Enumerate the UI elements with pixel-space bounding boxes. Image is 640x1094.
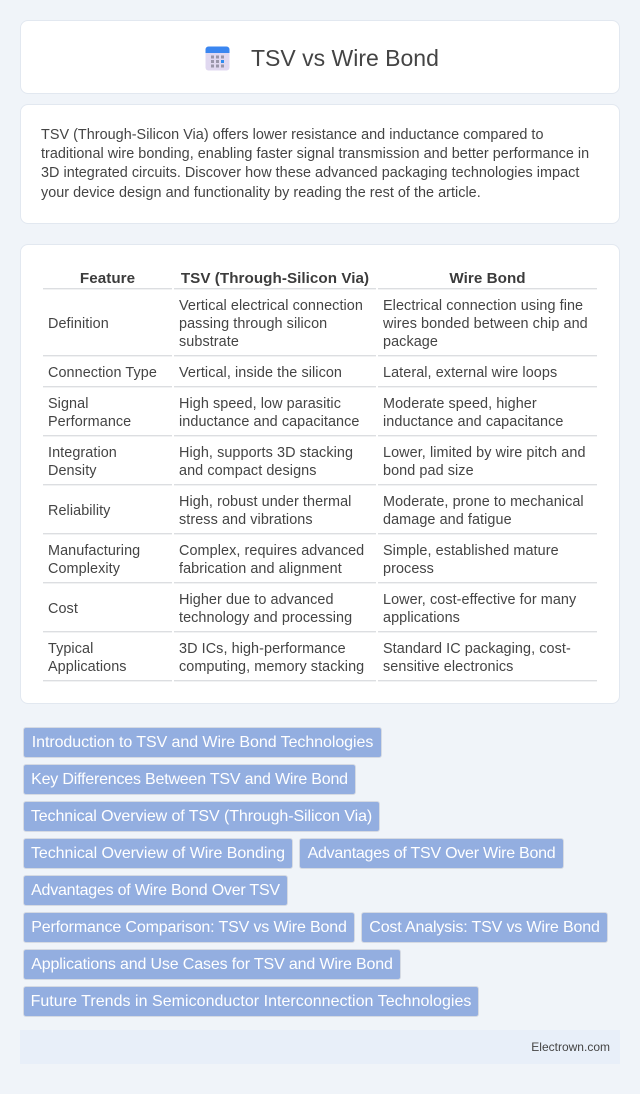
row: Reliability: High, robust under thermal — [179, 494, 351, 510]
row: Connection Type: Lateral, external wire loops — [383, 365, 557, 381]
tag: applications — [23, 949, 401, 980]
row: Cost: Cost — [48, 601, 78, 617]
intro text — [41, 127, 589, 201]
row: Definition: substrate — [179, 334, 239, 350]
row: Definition — [48, 298, 588, 350]
row: Connection Type: Vertical, inside the silicon — [179, 365, 342, 381]
row: Cost: applications — [383, 610, 460, 626]
table header row — [80, 270, 526, 287]
topic tags — [23, 727, 608, 1017]
intro panel — [20, 104, 620, 224]
footer credit: Electrown.com — [531, 1040, 610, 1054]
tag: TSV overview: Technical Overview of TSV (Through-Silicon Via) — [31, 808, 372, 825]
row: Typical Applications: sensitive electronics — [383, 659, 513, 675]
row: Reliability — [48, 494, 584, 528]
row: Manufacturing Complexity: process — [383, 561, 434, 577]
row: Connection Type — [48, 365, 557, 381]
tag: future trends: Future Trends in Semiconductor Interconnection Technologies — [31, 993, 471, 1010]
tag: performance comparison — [23, 912, 355, 943]
row: Integration Density: High, supports 3D stacking — [179, 445, 353, 461]
row: Integration Density: Integration — [48, 445, 117, 461]
row: Integration Density: Density — [48, 463, 97, 479]
footer — [20, 1030, 620, 1064]
table header row: Wire Bond — [449, 270, 526, 287]
tag: performance comparison: Performance Comparison: TSV vs Wire Bond — [31, 919, 347, 936]
tag: applications: Applications and Use Cases for TSV and Wire Bond — [31, 956, 393, 973]
tag: wire bonding overview: Technical Overview of Wire Bonding — [31, 845, 285, 862]
row: Typical Applications: computing, memory stacking — [179, 659, 364, 675]
tag: advantages of wire bond — [23, 875, 288, 906]
row: Signal Performance: Signal — [48, 396, 88, 412]
tag: key differences: Key Differences Between TSV and Wire Bond — [31, 771, 348, 788]
row: Manufacturing Complexity: Manufacturing — [48, 543, 140, 559]
row: Typical Applications — [48, 641, 571, 675]
row: Typical Applications: Applications — [48, 659, 127, 675]
row: Signal Performance: High speed, low parasitic — [179, 396, 341, 412]
tag: advantages of wire bond: Advantages of Wire Bond Over TSV — [31, 882, 280, 899]
row: Typical Applications: Typical — [48, 641, 93, 657]
row: Signal Performance — [48, 396, 564, 430]
row: Reliability: Reliability — [48, 503, 110, 519]
row: Connection Type: Connection Type — [48, 365, 157, 381]
row: Cost: Lower, cost-effective for many — [383, 592, 576, 608]
row: Manufacturing Complexity: Simple, established mature — [383, 543, 559, 559]
tag: cost analysis — [361, 912, 608, 943]
row: Manufacturing Complexity — [48, 543, 559, 577]
table header row: TSV (Through-Silicon Via) — [181, 270, 369, 287]
row: Definition: Definition — [48, 316, 109, 332]
row: Typical Applications: 3D ICs, high-performance — [179, 641, 346, 657]
comparison table panel — [20, 244, 620, 704]
intro text: 3D integrated circuits. Discover how these advanced packaging technologies impact — [41, 165, 579, 181]
icon: calendar — [206, 46, 230, 70]
tag: TSV overview — [23, 801, 380, 832]
intro text: your device design and functionality by reading the rest of the article. — [41, 185, 481, 201]
row: Reliability: stress and vibrations — [179, 512, 313, 528]
tag: advantages of TSV: Advantages of TSV Over Wire Bond — [308, 845, 555, 862]
intro text: TSV (Through-Silicon Via) offers lower resistance and inductance compared to — [41, 127, 543, 143]
row: Signal Performance: inductance and capacitance — [179, 414, 360, 430]
row: Integration Density: bond pad size — [383, 463, 474, 479]
title: TSV vs Wire Bond — [251, 45, 439, 71]
row: Typical Applications: Standard IC packaging, cost- — [383, 641, 571, 657]
tag: wire bonding overview — [23, 838, 293, 869]
tag: cost analysis: Cost Analysis: TSV vs Wire Bond — [369, 919, 600, 936]
row: Manufacturing Complexity: Complexity — [48, 561, 120, 577]
tag: key differences — [23, 764, 356, 795]
row: Cost: technology and processing — [179, 610, 352, 626]
tag: introduction — [23, 727, 382, 758]
row: Signal Performance: inductance and capacitance — [383, 414, 564, 430]
row: Signal Performance: Moderate speed, higher — [383, 396, 537, 412]
row: Integration Density — [48, 445, 586, 479]
table header row: Feature — [80, 270, 135, 287]
row: Reliability: damage and fatigue — [383, 512, 512, 528]
row: Reliability: Moderate, prone to mechanical — [383, 494, 584, 510]
row: Manufacturing Complexity: fabrication and alignment — [179, 561, 342, 577]
tag: future trends — [23, 986, 479, 1017]
row: Cost — [48, 592, 576, 626]
row: Manufacturing Complexity: Complex, requires advanced — [179, 543, 364, 559]
tag: introduction: Introduction to TSV and Wire Bond Technologies — [32, 734, 373, 751]
header panel — [20, 20, 620, 94]
row: Integration Density: and compact designs — [179, 463, 317, 479]
row: Integration Density: Lower, limited by wire pitch and — [383, 445, 586, 461]
row: Definition: Electrical connection using fine — [383, 298, 583, 314]
intro text: traditional wire bonding, enabling faster signal transmission and better performance in — [41, 146, 589, 162]
row: Definition: passing through silicon — [179, 316, 327, 332]
row: Signal Performance: Performance — [48, 414, 131, 430]
row: Definition: wires bonded between chip and — [383, 316, 588, 332]
tag: advantages of TSV — [299, 838, 564, 869]
row: Cost: Higher due to advanced — [179, 592, 334, 608]
row: Definition: package — [383, 334, 438, 350]
row: Definition: Vertical electrical connection — [179, 298, 363, 314]
